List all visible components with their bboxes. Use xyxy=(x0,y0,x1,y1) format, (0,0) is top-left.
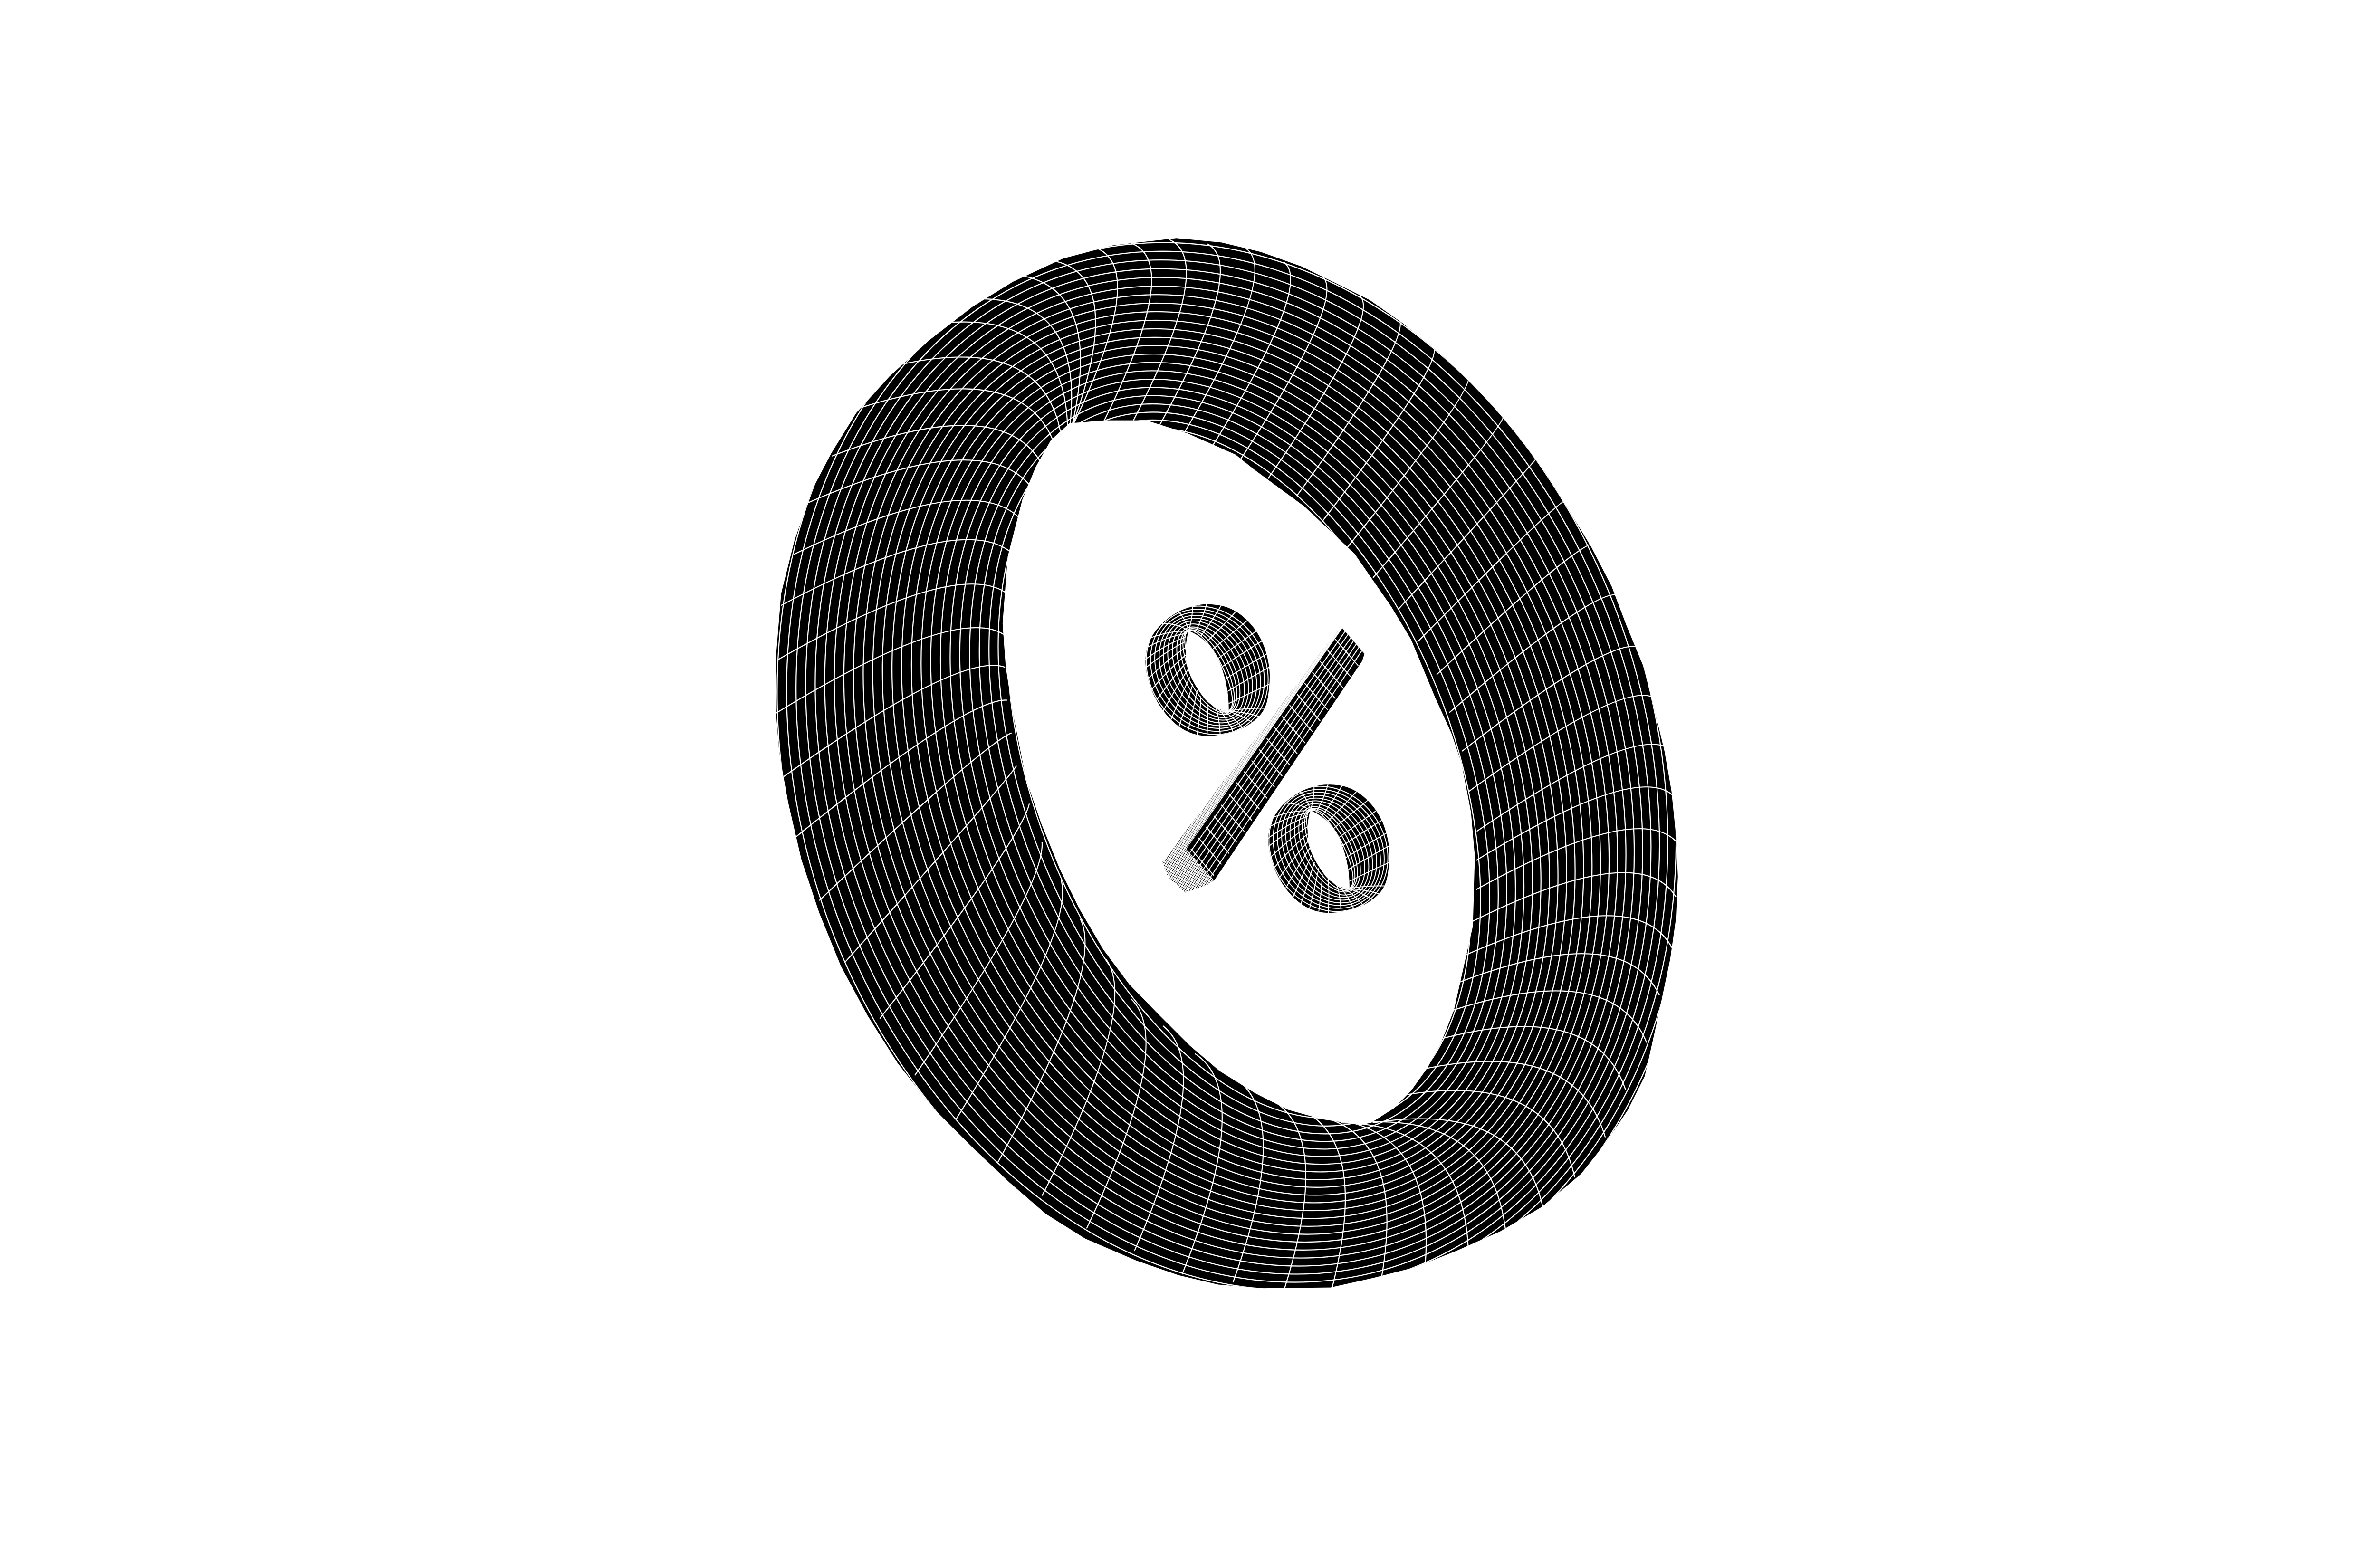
wireframe ring xyxy=(776,238,1678,1289)
ring mesh lines xyxy=(776,239,1677,1288)
ring body xyxy=(776,238,1678,1288)
illustration: wireframe ring with percent sign xyxy=(776,238,1678,1289)
percent upper circle xyxy=(1121,582,1293,758)
percent slash xyxy=(1162,628,1366,893)
percent sign xyxy=(1145,604,1389,913)
percent lower circle xyxy=(1245,763,1412,935)
